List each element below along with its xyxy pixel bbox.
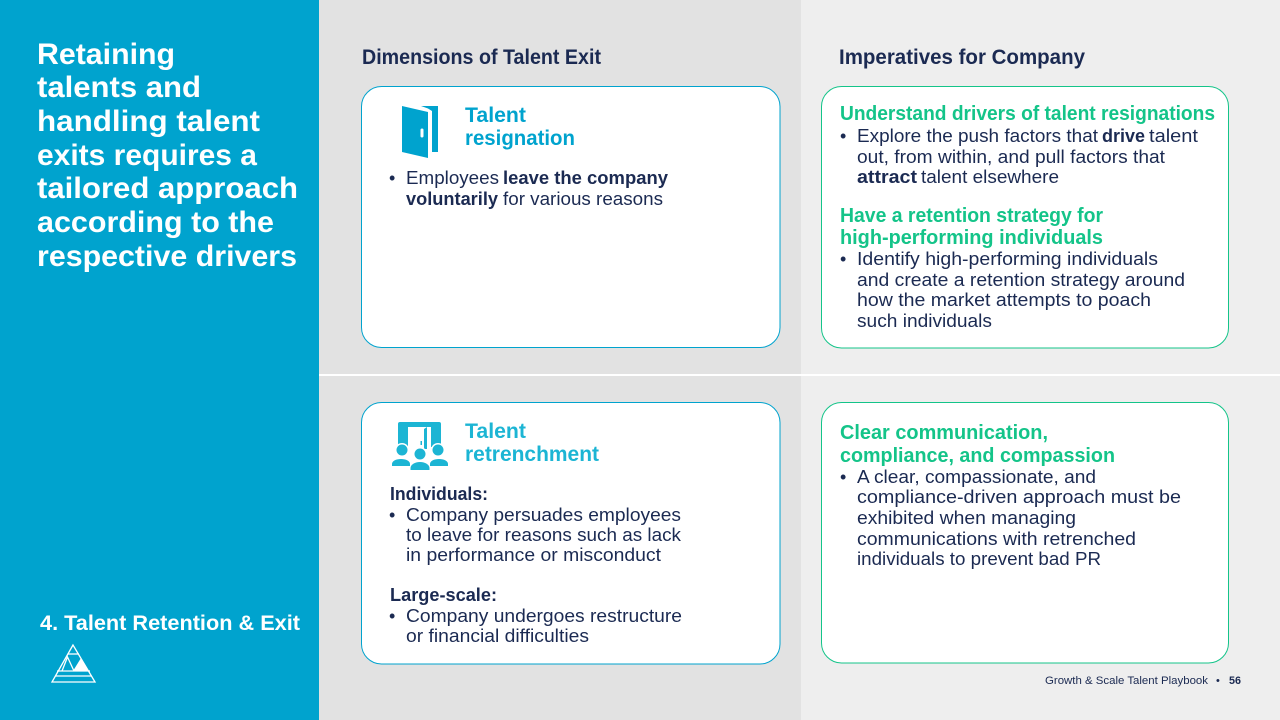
card title: resignation [465,127,575,150]
panel: left sidebar [0,0,319,720]
text: large-scale: Large-scale: [390,585,497,605]
imperative: retention strategy: and create a retention strategy around [857,270,1185,290]
imperative: understand drivers: drive [1102,126,1145,146]
imperative: understand drivers: talent elsewhere [921,167,1059,187]
imperative: retention strategy: Identify high-performing individuals [857,249,1158,269]
imperative: clear communication: compliance, and compassion [840,444,1115,467]
bullet text: voluntarily [406,189,498,209]
title: main message: handling talent [37,105,260,138]
card title: Talent [465,104,526,127]
bullet text: Employees [406,168,499,188]
title: main message [37,38,298,273]
panel: talent resignation [362,86,780,348]
title: main message: according to the [37,206,274,239]
section label: 4. Talent Retention & Exit [40,612,300,635]
title: main message: talents and [37,71,201,104]
imperative: understand drivers: Explore the push factors that [857,126,1098,146]
imperative: understand drivers: talent [1149,126,1198,146]
text: individuals: Individuals: [390,484,488,504]
imperative: retention strategy [840,204,1185,331]
title: main message: exits requires a [37,139,258,172]
imperative: retention strategy: high-performing individuals [840,226,1103,249]
imperative: understand drivers [840,102,1215,187]
footer: Growth & Scale Talent Playbook [1045,675,1209,687]
imperative: retention strategy: Have a retention strategy for [840,204,1103,227]
text: individuals: Company persuades employees [406,505,681,525]
text: individuals: • [389,505,395,525]
imperative: clear communication: Clear communication, [840,421,1048,444]
imperative: retention strategy: • [840,249,846,269]
bullet text: • [389,168,395,188]
title: main message: Retaining [37,38,175,71]
heading: imperatives: Imperatives for Company [839,46,1085,69]
panel: retrenchment imperatives [822,402,1228,663]
text: individuals [389,484,682,565]
bullet text: for various reasons [503,189,663,209]
card title [465,104,575,150]
heading: dimensions: Dimensions of Talent Exit [362,46,601,69]
title: main message: tailored approach [37,172,298,205]
text: large-scale [389,585,682,646]
footer: • [1216,675,1220,687]
imperative: understand drivers: attract [857,167,917,187]
imperative: understand drivers: out, from within, and pull factors that [857,147,1165,167]
footer: 56 [1229,675,1241,687]
imperative: understand drivers: Understand drivers of talent resignations [840,102,1215,125]
panel: talent retrenchment [362,402,780,664]
icon: door with people [392,422,448,470]
imperative: retention strategy: how the market attempts to poach [857,290,1151,310]
text: large-scale: Company undergoes restructure [406,606,682,626]
imperative: clear communication [840,421,1181,569]
text: individuals: to leave for reasons such as lack [406,525,682,545]
title: main message: respective drivers [37,240,297,273]
icon: pyramid logo [52,645,95,682]
imperative: retention strategy: such individuals [857,311,992,331]
imperative: clear communication: communications with retrenched [857,529,1136,549]
imperative: understand drivers: • [840,126,846,146]
text: large-scale: • [389,606,395,626]
icon: door [402,106,438,158]
bullet text [389,168,668,209]
panel: resignation imperatives [822,86,1228,348]
imperative: clear communication: exhibited when managing [857,508,1076,528]
text: large-scale: or financial difficulties [406,626,589,646]
card title [465,420,599,466]
bullet text: leave the company [503,168,668,188]
card title: Talent [465,420,526,443]
imperative: clear communication: compliance-driven approach must be [857,487,1181,507]
imperative: clear communication: • [840,467,846,487]
text: individuals: in performance or misconduct [406,545,661,565]
imperative: clear communication: A clear, compassionate, and [857,467,1096,487]
imperative: clear communication: individuals to prevent bad PR [857,549,1101,569]
card title: retrenchment [465,443,599,466]
